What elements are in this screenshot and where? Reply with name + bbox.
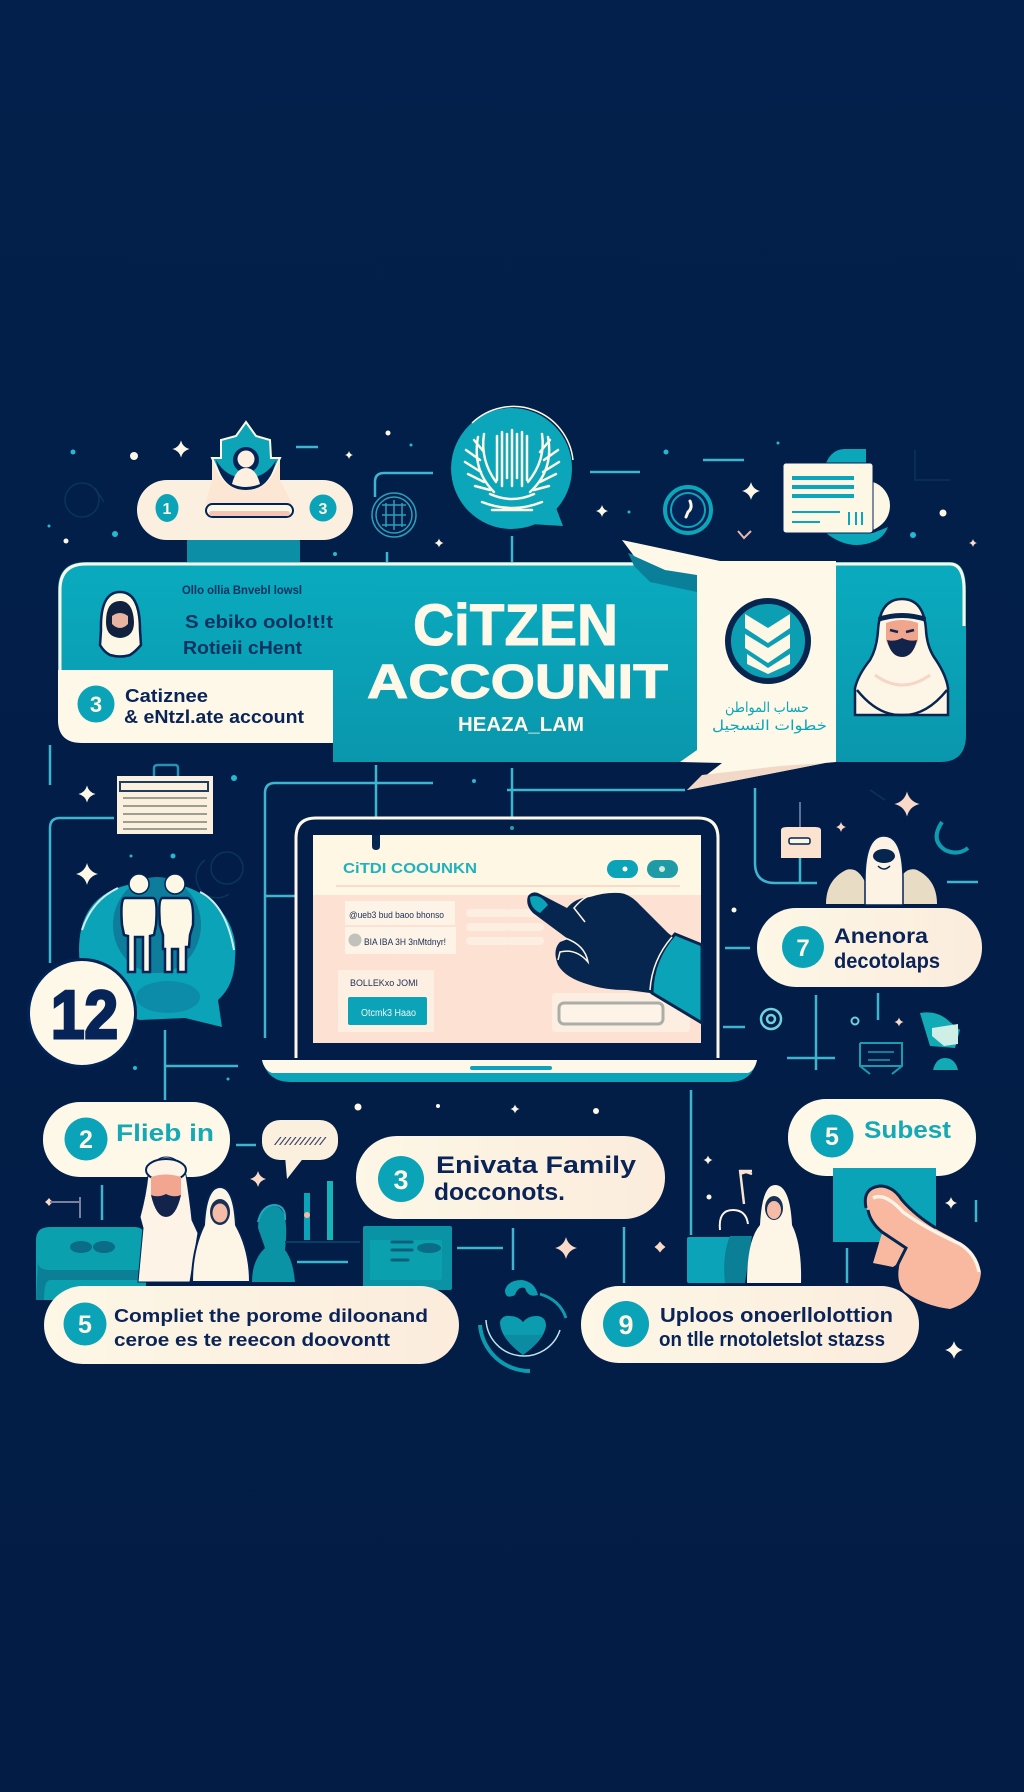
number badge 1: 1 [163, 501, 172, 518]
step 2 text: Flieb in [116, 1120, 214, 1147]
title: CiTZEN [413, 593, 618, 658]
left panel text: S ebiko oolo!t!t [185, 612, 333, 632]
ribbon arabic text: حساب المواطن [725, 699, 809, 716]
screen form rows: BIA IBA 3H 3nMtdnyr! [364, 937, 446, 947]
left panel text: Ollo ollia Bnvebl lowsl [182, 583, 302, 597]
icon: couple in speech bubble [79, 874, 235, 1027]
headset person [252, 1205, 295, 1282]
number badge 12 [27, 958, 137, 1068]
banner left teal panel [58, 562, 966, 762]
ribbon shadow [628, 553, 697, 592]
number badge 3: 3 [319, 501, 328, 518]
step 7 text: decotolaps [834, 950, 940, 973]
number badge 5 [810, 1114, 854, 1158]
sparkles and dots [64, 430, 963, 1359]
small left connector [50, 1197, 80, 1218]
teal folder behind card [187, 533, 300, 562]
icon: shield chevrons [728, 601, 808, 681]
screen pills [607, 860, 678, 878]
small right icons [761, 822, 968, 1074]
icon: teal blob [933, 1058, 958, 1070]
step 3 family documents card [356, 1136, 665, 1219]
number badge 3 [310, 494, 336, 522]
step text [434, 1152, 637, 1206]
speech bubble: ////////// [273, 1136, 327, 1148]
portrait: right man [855, 599, 948, 715]
step 3 badge: 3 [90, 692, 102, 717]
number badge 3: 3 [393, 1165, 409, 1195]
laptop screen [313, 835, 701, 1043]
number badge 1 [156, 494, 178, 522]
step 3 text: & eNtzl.ate account [124, 707, 304, 727]
laptop [262, 818, 757, 1082]
number badge 5: 5 [825, 1123, 839, 1151]
icon: pointing hand [527, 892, 702, 1023]
number badge 7 [782, 926, 824, 968]
number badge 7: 7 [796, 935, 810, 962]
step text: docconots. [434, 1179, 565, 1206]
main banner [58, 540, 966, 790]
teal device left [36, 1227, 146, 1300]
step 3 text: Catiznee [125, 686, 208, 706]
woman figure [747, 1185, 801, 1283]
ribbon arabic text [712, 699, 827, 734]
top connector tab [372, 835, 380, 850]
icon: teal arc [937, 822, 968, 853]
title: HEAZA_LAM [458, 714, 584, 736]
banner top border [60, 564, 964, 670]
center title panel [333, 562, 697, 762]
left panel text: Rotieii cHent [183, 638, 302, 658]
left panel text [182, 583, 333, 658]
step 1 card with user badge [137, 422, 353, 562]
icon: emblem speech bubble [451, 406, 573, 529]
woman figure [192, 1187, 250, 1282]
speech bubble [262, 1120, 338, 1179]
step 2 card [43, 1102, 230, 1177]
step text: Subest [864, 1117, 951, 1144]
step 3 text [124, 686, 304, 727]
number badge 12: 12 [51, 977, 118, 1053]
icon: small seal [372, 493, 416, 537]
screen submit panel [338, 970, 434, 1032]
icon: target ring [761, 1009, 781, 1029]
ribbon [622, 540, 836, 790]
title [367, 593, 668, 736]
teal device right [363, 1226, 452, 1290]
right group: woman with device [687, 1170, 801, 1283]
man figure [138, 1157, 198, 1282]
screen form rows: @ueb3 bud baoo bhonso [349, 910, 444, 920]
icon: clock [665, 487, 711, 533]
icon: briefcase document [117, 765, 213, 834]
bars [285, 1181, 360, 1242]
screen input [552, 993, 690, 1032]
number badge 5: 5 [78, 1311, 92, 1339]
faint background ornaments [65, 450, 950, 898]
step text: on tlle rnotoletslot stazss [659, 1329, 885, 1351]
headset person [720, 1210, 752, 1283]
step text [114, 1306, 428, 1350]
teal device [687, 1237, 737, 1283]
step 7 card [757, 908, 982, 987]
laptop base [262, 1060, 757, 1082]
icon: box with pole [781, 802, 821, 858]
connector lines [50, 447, 978, 1283]
number badge 9 [603, 1301, 649, 1347]
icon: heart with arcs [480, 1280, 566, 1371]
screen submit panel: Otcmk3 Haao [361, 1008, 416, 1019]
icon: maple badge [212, 422, 280, 490]
icon: monitor [860, 1043, 902, 1074]
left group: people and devices [36, 1157, 452, 1300]
step text: ceroe es te reecon doovontt [114, 1330, 390, 1350]
step 5 complete card [44, 1286, 459, 1364]
step text: Uploos onoerllolottion [660, 1305, 893, 1327]
icon: small pink chevron [738, 531, 751, 538]
portrait: left avatar [100, 592, 141, 656]
number badge 3 [378, 1156, 424, 1202]
ribbon arabic text: خطوات التسجيل [712, 717, 827, 734]
step text [659, 1305, 893, 1351]
number badge 2: 2 [79, 1126, 93, 1154]
figure above step 7 [826, 836, 937, 905]
screen submit panel: BOLLEKxo JOMI [350, 978, 418, 988]
number badge 9: 9 [618, 1310, 634, 1340]
banner cream step panel [58, 670, 333, 743]
icon: document card [783, 449, 890, 545]
title: ACCOUNIT [367, 656, 668, 709]
laptop frame [296, 818, 718, 1058]
screen form rows [345, 901, 540, 954]
icon: small ring [852, 1018, 858, 1024]
bar [206, 504, 293, 517]
step 7 text: Anenora [834, 925, 928, 948]
step 7 text [834, 925, 940, 973]
step 5 submit card [788, 1099, 976, 1176]
man figure [121, 874, 157, 972]
icon: pole cross [739, 1170, 752, 1204]
step text: Enivata Family [436, 1152, 637, 1179]
submit button with hand [833, 1168, 981, 1309]
step 9 card [581, 1286, 919, 1363]
number badge 5 [64, 1302, 106, 1346]
step 3 badge [78, 686, 114, 722]
woman figure [159, 874, 193, 972]
step text: Compliet the porome diloonand [114, 1306, 428, 1326]
icon: handshake [920, 1012, 960, 1048]
number badge 2 [64, 1118, 108, 1160]
screen heading: CiTDI COOUNKN [343, 860, 477, 877]
